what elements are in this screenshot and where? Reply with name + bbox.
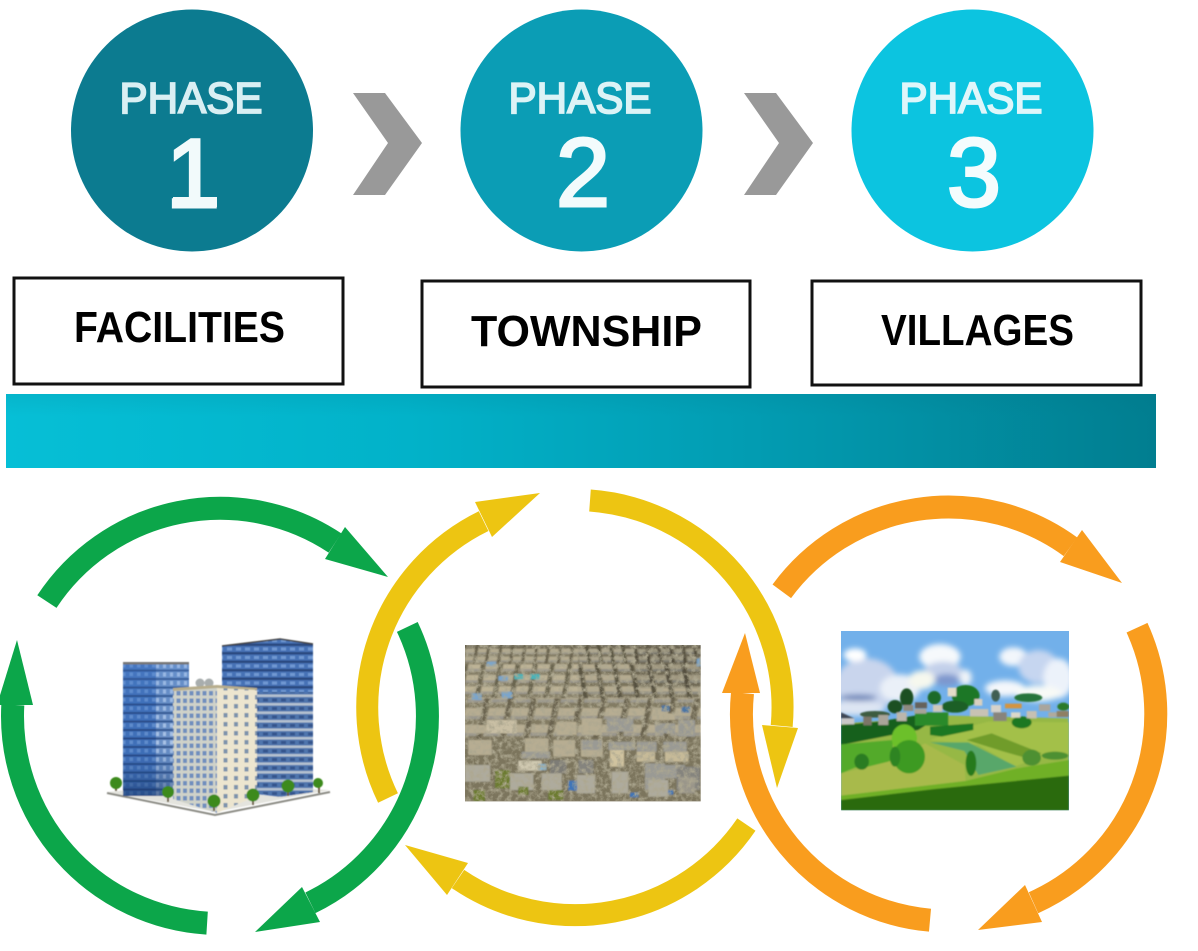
dark tree masses: [860, 685, 1069, 718]
phase 2 badge: [460, 10, 702, 252]
trees: [110, 777, 323, 811]
image: office buildings: [107, 639, 330, 815]
label: township: TOWNSHIP: [471, 307, 702, 356]
green arrow right: [255, 627, 427, 932]
phase 2 badge: PHASE: [508, 74, 652, 123]
cycle: yellow township: [367, 493, 798, 915]
phase 1 badge: [71, 10, 313, 252]
arrow: phase 1 to phase 2: [353, 93, 422, 195]
gradient progress bar: [6, 394, 1156, 468]
mottled texture: [465, 645, 701, 801]
orange arrow top: [782, 507, 1122, 591]
orange arrow left: [722, 633, 930, 920]
phase 3 badge: PHASE: [900, 74, 1042, 123]
yellow arrow bottom: [405, 825, 746, 915]
phase header row: [71, 10, 1094, 252]
green arrow left: [0, 640, 207, 923]
label: villages: [812, 281, 1141, 385]
phase 3 badge: 3: [947, 118, 1001, 227]
large foreground tree: [892, 724, 917, 752]
middle tower: [173, 685, 257, 813]
dark upper-right cast: [635, 645, 702, 688]
far treeline and meadows: [841, 685, 1069, 810]
label: township: [422, 281, 750, 387]
arrow: phase 2 to phase 3: [744, 93, 813, 195]
roof domes: [196, 678, 214, 688]
hedges and small trees: [854, 712, 1068, 776]
label: facilities: FACILITIES: [74, 303, 285, 352]
green arrow top: [47, 508, 388, 602]
blue roofs: [472, 658, 701, 713]
pavement: [107, 788, 330, 815]
phase 1 badge: 1: [166, 119, 220, 228]
right tower: [222, 639, 313, 797]
phase 1 badge: PHASE: [120, 74, 262, 123]
orange arrow right: [978, 628, 1156, 930]
vegetation: [473, 770, 563, 801]
image: township aerial photo: [462, 642, 705, 805]
blue details: [538, 764, 673, 797]
cycle: orange villages: [722, 507, 1156, 930]
phase 3 badge: [852, 10, 1094, 252]
cycle: green facilities: [0, 508, 427, 932]
village houses: [841, 688, 1069, 725]
left tower: [123, 662, 189, 796]
yellow arrow left: [367, 493, 540, 798]
label: facilities: [14, 278, 343, 384]
image: green hillside village: [825, 631, 1073, 810]
clouds: [825, 644, 1073, 716]
yellow arrow right: [590, 500, 798, 788]
large lower blocks: [465, 738, 702, 801]
label: villages: VILLAGES: [881, 306, 1074, 355]
phase 2 badge: 2: [556, 118, 610, 227]
